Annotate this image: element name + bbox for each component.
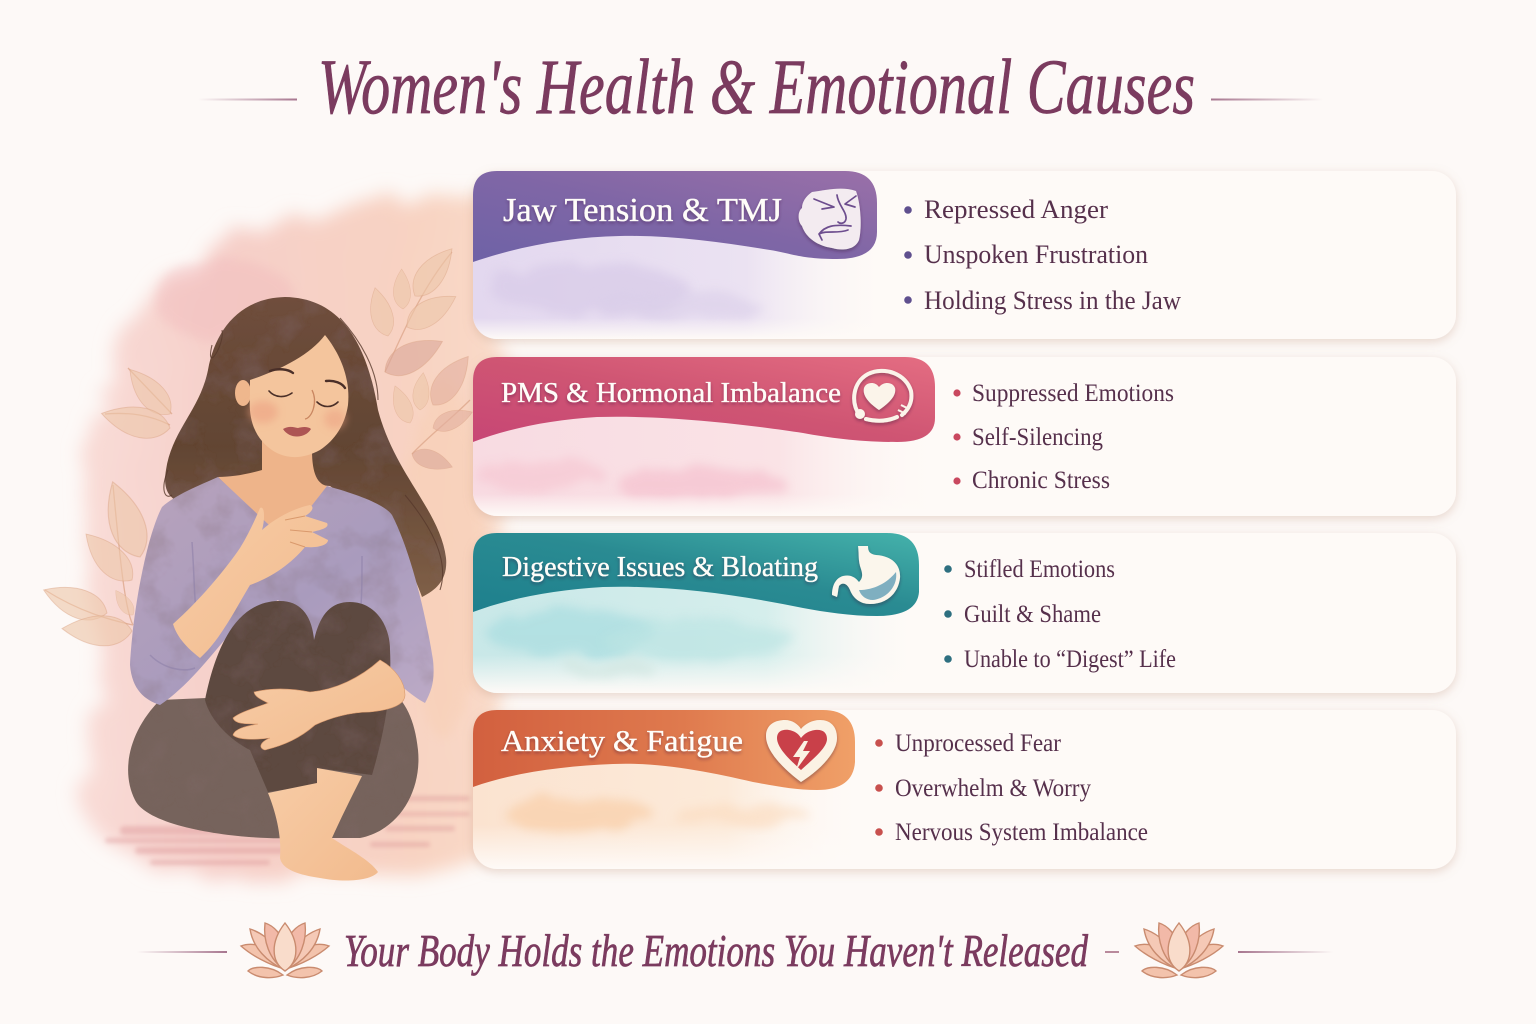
title text: Women's Health & Emotional Causes <box>318 43 1195 130</box>
card background <box>473 171 1456 339</box>
icon: tense face <box>799 189 861 249</box>
footer tagline <box>137 923 1333 978</box>
bulleted list: Nervous System Imbalance <box>895 819 1148 846</box>
sweater <box>130 477 434 705</box>
watercolor wash <box>473 764 813 860</box>
bulleted list: Overwhelm & Worry <box>895 775 1091 802</box>
bulleted list: Self-Silencing <box>972 424 1103 451</box>
tagline text: Your Body Holds the Emotions You Haven't Released <box>344 925 1089 976</box>
bulleted list <box>904 195 1181 315</box>
face <box>250 335 348 457</box>
shin and foot <box>268 768 378 880</box>
heading: Digestive Issues & Bloating <box>502 551 818 583</box>
bulleted list: Unable to “Digest” Life <box>964 646 1176 673</box>
panel: Anxiety & Fatigue <box>473 710 1456 869</box>
watercolor wash background <box>80 195 500 880</box>
title rule right <box>1211 98 1323 100</box>
icon: stomach <box>832 546 900 604</box>
header banner <box>473 533 919 616</box>
arm and hand on knee <box>233 660 405 750</box>
bulleted list <box>875 730 1148 846</box>
dash <box>1105 951 1119 953</box>
leaf branches <box>38 240 478 647</box>
rule right <box>1238 951 1333 953</box>
bulleted list: Guilt & Shame <box>964 601 1101 628</box>
panel: Jaw Tension & TMJ <box>473 171 1456 339</box>
icon: lotus right <box>1135 923 1223 978</box>
rule left <box>137 951 227 953</box>
back hair <box>165 297 446 597</box>
title rule left <box>198 98 297 100</box>
facial features <box>248 369 346 437</box>
icon: heart in ring <box>854 371 911 421</box>
floor brush strokes <box>105 796 470 865</box>
header banner <box>473 171 877 262</box>
bulleted list: Repressed Anger <box>924 195 1108 224</box>
illustration: seated woman with watercolor wash <box>38 195 500 880</box>
hair strands <box>164 318 443 590</box>
heading: Anxiety & Fatigue <box>501 723 743 758</box>
card background <box>473 533 1456 693</box>
watercolor wash <box>473 416 846 516</box>
icon: lotus left <box>241 923 329 978</box>
neck and chest <box>218 440 327 545</box>
knees and pants <box>205 601 390 792</box>
heading: PMS & Hormonal Imbalance <box>501 377 841 409</box>
icon: heart with lightning bolt <box>766 720 837 782</box>
arm and hand on chest <box>173 505 328 658</box>
bulleted list: Stifled Emotions <box>964 556 1115 583</box>
card background <box>473 357 1456 516</box>
card background <box>473 710 1456 869</box>
bulleted list <box>944 556 1176 673</box>
bulleted list: Suppressed Emotions <box>972 380 1174 407</box>
watercolor wash <box>473 236 808 339</box>
panel: Digestive Issues & Bloating <box>473 533 1456 693</box>
bulleted list: Chronic Stress <box>972 467 1110 494</box>
bulleted list: Unprocessed Fear <box>895 730 1062 757</box>
watercolor wash <box>473 586 854 693</box>
bulleted list: Unspoken Frustration <box>924 240 1148 269</box>
hips and lower body <box>128 690 418 838</box>
bulleted list <box>953 380 1174 494</box>
ear <box>235 380 251 406</box>
header banner <box>473 710 855 790</box>
bulleted list: Holding Stress in the Jaw <box>924 286 1181 315</box>
header banner <box>473 357 935 442</box>
sweater folds <box>150 542 362 670</box>
panel: PMS & Hormonal Imbalance <box>473 357 1456 516</box>
heading: Jaw Tension & TMJ <box>503 192 782 229</box>
